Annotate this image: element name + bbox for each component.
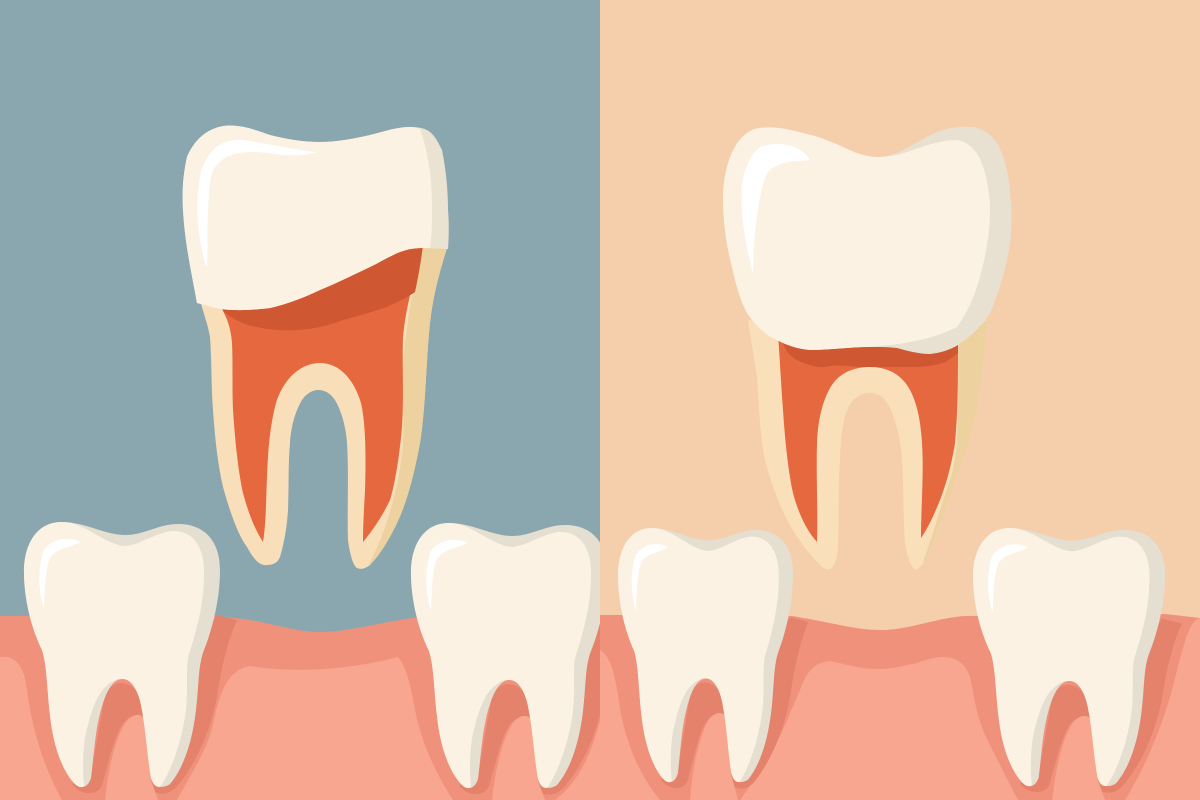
- root dentin: [748, 320, 987, 570]
- root shaded edge: [923, 320, 987, 562]
- panel: left background: [0, 0, 600, 800]
- tooth: right panel, fitted crown: [723, 127, 1012, 570]
- side tooth: right panel, left: [618, 528, 808, 800]
- tooth: left panel, misaligned crown: [183, 126, 449, 569]
- side tooth: left panel, right: [410, 523, 600, 800]
- pulp shadow: [222, 240, 423, 330]
- pulp shadow: [778, 335, 958, 367]
- gum: left panel: [0, 615, 600, 800]
- panel: right background: [600, 0, 1200, 800]
- crown highlight: [742, 144, 810, 273]
- side tooth: right panel, right: [973, 528, 1182, 800]
- pulp: [778, 335, 958, 542]
- side tooth: left panel, left: [24, 522, 237, 800]
- root dentin: [200, 235, 448, 569]
- crown highlight: [197, 140, 317, 268]
- pulp chamber: [222, 240, 423, 542]
- crown shade: [183, 126, 449, 310]
- gum: right panel: [600, 614, 1200, 800]
- crown body: [183, 126, 432, 310]
- root shaded edge: [368, 245, 448, 566]
- crown shade: [723, 127, 1012, 354]
- crown body: [723, 127, 990, 350]
